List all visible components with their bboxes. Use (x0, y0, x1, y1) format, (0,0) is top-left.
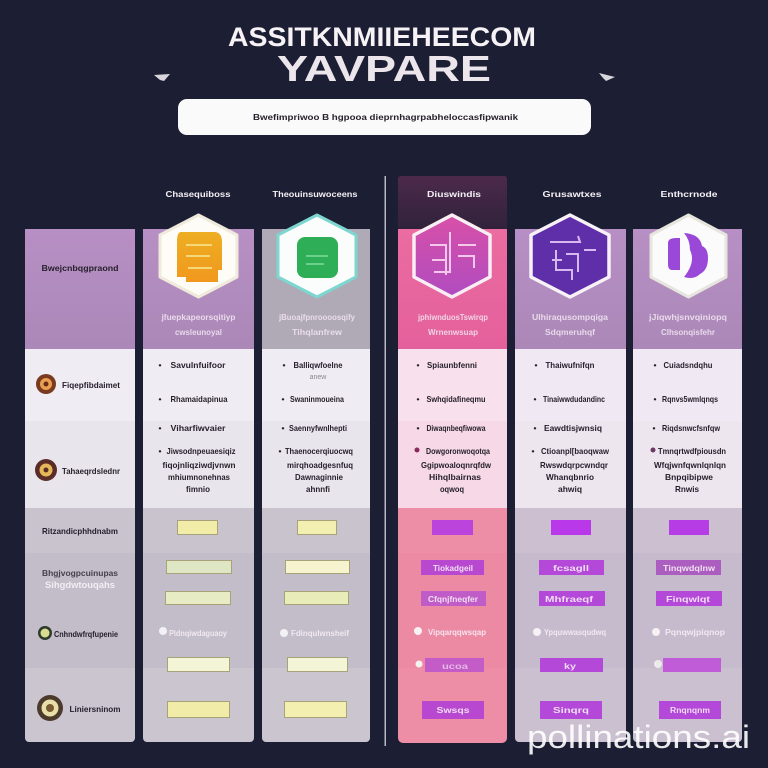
highlighted column tab (398, 176, 507, 230)
panel: column 4: Eawdtisjwnsiq (544, 423, 602, 433)
panel: column 5: Tinqwdqlnw (663, 564, 716, 573)
panel: column 2: • (282, 423, 285, 433)
icon: row badge 2 (35, 459, 57, 481)
panel: column 3: Cfqnjfneqfer (428, 595, 478, 604)
panel: column 5: Clhsonqisfehr (661, 327, 716, 337)
panel: column 2: Fdinqulwnsheif (291, 629, 349, 638)
column headings: Diuswindis (427, 189, 481, 199)
panel: column 1 (143, 215, 254, 742)
panel: column 3: Dowgoronwoqotqa (426, 446, 490, 456)
panel: column 2: • (282, 394, 285, 404)
panel: column 1: Rhamaidapinua (170, 394, 228, 404)
panel: column 3: Vipqarqqwsqap (428, 628, 486, 637)
panel: column 5: Pqnqwjpiqnop (665, 628, 725, 637)
panel: column 4 (515, 215, 626, 742)
panel: column 4: ky (564, 662, 577, 671)
panel: column 5: jJiqwhjsnvqiniopq (648, 312, 727, 322)
panel: column 1: Viharfiwvaier (170, 423, 226, 433)
column headings: Theouinsuwoceens (272, 189, 358, 199)
panel: column 5: Rqnvs5wmlqnqs (662, 394, 718, 404)
panel: column 3: Swsqs (436, 706, 470, 715)
panel: column 3: Diwaqnbeqfiwowa (426, 423, 486, 433)
panel: row labels: Tahaeqrdslednr (62, 466, 121, 476)
title: ASSITKNMIIEHEECOM (228, 22, 536, 52)
panel: column 4: Mhfraeqf (545, 595, 593, 604)
panel: column 3: Hihqlbairnas (429, 472, 481, 482)
panel: column 4: Thaiwufnifqn (546, 360, 594, 370)
panel: column 5: Tmnqrtwdfpiousdn (658, 446, 726, 456)
panel: column 5: Bnpqibipwe (665, 472, 713, 482)
panel: column 4: Ypquwwasqudwq (544, 628, 606, 637)
panel: column 3: • (417, 360, 420, 370)
panel: column 2: Saennyfwnlhepti (289, 423, 347, 433)
icon: violet hexagon (531, 215, 609, 297)
panel: column 4: Tinaiwwdudandinc (543, 394, 605, 404)
panel: column 1: fimnio (186, 484, 210, 494)
icon: row badge 1 (36, 374, 56, 394)
column headings: Grusawtxes (542, 189, 602, 199)
panel: column 4: Ctioanpl[baoqwaw (541, 446, 609, 456)
panel: column 4: • (535, 360, 538, 370)
panel: column 3: Swhqidafineqmu (426, 394, 486, 404)
panel: column 1: cwsleunoyal (175, 327, 222, 337)
panel: column 2: Dawnaginnie (295, 472, 343, 482)
bars (166, 520, 232, 718)
panel: column 2: ahnnfi (306, 484, 330, 494)
panel: column 2: • (279, 446, 282, 456)
panel: column 2: jBuoajfpnroooosqify (278, 312, 355, 322)
panel: column 1: jfuepkapeorsqitiyp (161, 312, 236, 322)
icon: white hexagon (651, 215, 726, 297)
panel: column 5 (633, 215, 742, 742)
icon: orange hexagon (160, 215, 237, 297)
icon: row badge 4 (37, 695, 63, 721)
panel: row labels: Bhgjvogpcuinupas (42, 568, 118, 578)
panel: row labels: Cnhndwfrqfupenie (54, 629, 118, 639)
panel: column 4: • (532, 446, 535, 456)
panel: column 1: Jiwsodnpeuaesiqiz (166, 446, 236, 456)
panel: column 4: Ulhiraqusompqiga (532, 312, 608, 322)
icon: left ornament (154, 74, 170, 81)
bars (421, 520, 486, 719)
panel: column 4: Sdqmeruhqf (545, 327, 595, 337)
panel: column 1: • (159, 423, 162, 433)
panel: column 2: Tihqlanfrew (292, 327, 342, 337)
panel: column 3: jphiwnduosTswirqp (417, 312, 488, 322)
panel: column 4: ahwiq (558, 484, 582, 494)
panel: column 2: anew (310, 374, 327, 381)
panel: column 5: Rnqnqnm (670, 706, 710, 715)
panel: column 4: fcsagll (553, 564, 589, 573)
panel: column 4: Whanqbnrio (546, 472, 594, 482)
title (228, 22, 536, 89)
panel: column 4: • (534, 423, 537, 433)
panel: column 2: • (283, 360, 286, 370)
panel: column 4: • (534, 394, 537, 404)
watermark: pollinations.ai (527, 719, 750, 755)
panel: column 1: • (159, 394, 162, 404)
panel: column 1: Savulnfuifoor (170, 360, 226, 370)
icon: right ornament (599, 73, 615, 81)
panel: column 5: • (654, 360, 657, 370)
panel: column 2: Swaninmoueina (290, 394, 344, 404)
panel: column 3: Ggipwoaloqnrqfdw (421, 460, 491, 470)
panel: row labels: Liniersninom (70, 704, 121, 714)
panel: row labels: Sihgdwtouqahs (45, 580, 115, 590)
panel: column 3: Spiaunbfenni (427, 360, 477, 370)
panel: row labels: Bwejcnbqgpraond (42, 263, 118, 273)
panel: column 5: Riqdsnwcfsnfqw (662, 423, 720, 433)
panel: row labels: Ritzandicphhdnabm (42, 526, 118, 536)
panel: column 3: • (417, 423, 420, 433)
panel: row labels: Fiqepfibdaimet (62, 380, 120, 390)
panel: column 4: Sinqrq (553, 706, 589, 715)
panel: column 2 (262, 215, 370, 742)
subtitle banner (178, 99, 591, 135)
panel: column 5: • (653, 423, 656, 433)
column headings: Enthcrnode (660, 189, 718, 199)
bars (284, 520, 350, 718)
panel: column 1: • (159, 360, 162, 370)
panel: column 3 (398, 215, 507, 743)
panel: column 5: Wfqjwnfqwnlqnlqn (654, 460, 726, 470)
panel: column 4: Rwswdqrpcwndqr (540, 460, 609, 470)
panel: column 3: ucoa (442, 662, 469, 671)
panel: column 5: Cuiadsndqhu (664, 360, 712, 370)
subtitle banner: Bwefimpriwoo B hgpooa dieprnhagrpabheloccasfipwanik (253, 112, 518, 122)
icon: row badge 3 (38, 626, 52, 640)
panel: column 3: • (417, 394, 420, 404)
panel: column 3: Tiokadgeil (433, 564, 473, 573)
panel: column 1: Pldnqiwdaguaoy (169, 629, 227, 638)
panel: column 5: • (654, 394, 657, 404)
panel: column 2: Thaenocerqiuocwq (285, 446, 353, 456)
panel: column 2: mirqhoadgesnfuq (287, 460, 353, 470)
icon: pink hexagon (414, 215, 490, 297)
bars (539, 520, 605, 719)
panel: column 1: mhiumnonehnas (168, 472, 230, 482)
column headings (166, 189, 718, 199)
panel: column 5: Finqwlqt (666, 595, 710, 604)
icon: green hexagon (278, 215, 356, 297)
panel: column 1: fiqojnliqziwdjvnwn (162, 460, 236, 470)
title: YAVPARE (277, 48, 491, 89)
panel: row labels (25, 229, 135, 742)
column headings: Chasequiboss (166, 189, 231, 199)
divider (384, 176, 386, 746)
panel: column 3: oqwoq (440, 484, 464, 494)
panel: column 1: • (159, 446, 162, 456)
panel: column 3: Wrnenwsuap (428, 327, 478, 337)
panel: column 5: Rnwis (675, 484, 699, 494)
bars (656, 520, 722, 719)
panel: column 2: Balliqwfoelne (294, 360, 343, 370)
